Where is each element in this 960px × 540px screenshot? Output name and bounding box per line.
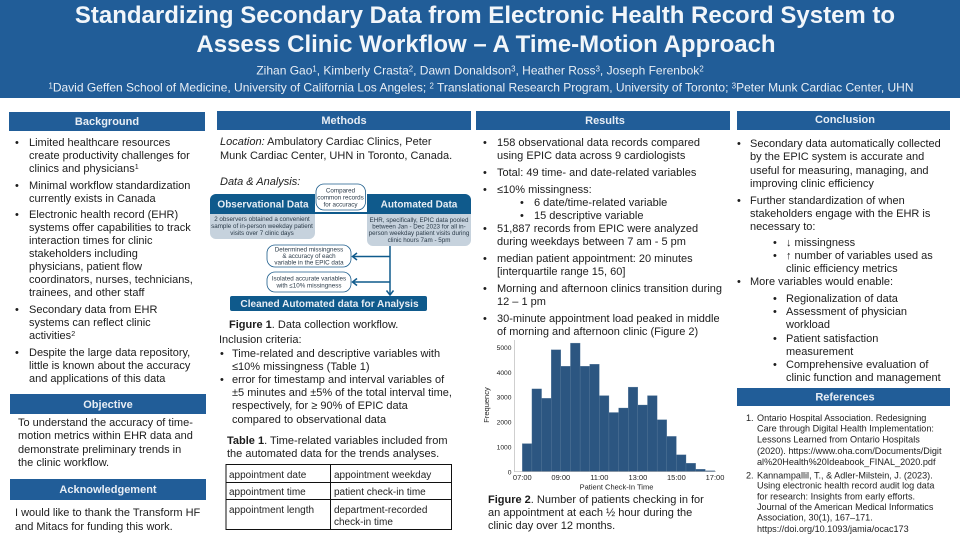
results bullets: ≤10% missingness: [497, 184, 592, 196]
reference list: for research: Insights from early efforts. [757, 492, 915, 502]
background bullets: • [15, 347, 19, 359]
conclusion bullets: Further standardization of when [750, 195, 905, 207]
background bullets: stakeholders including [29, 248, 138, 260]
background bullets: Limited healthcare resources [29, 137, 171, 149]
affiliations: Peter Munk Cardiac Center, UHN [736, 80, 914, 94]
results bullets: 51,887 records from EPIC were analyzed [497, 223, 698, 235]
x axis labels: 09:00 [551, 473, 570, 482]
reference list: Ontario Hospital Association. Redesigning [757, 413, 926, 423]
conclusion bullets: • [773, 333, 777, 345]
conclusion bullets: • [773, 306, 777, 318]
automated description [369, 217, 470, 244]
objective text [18, 417, 193, 469]
panel: acknowledgement [10, 479, 206, 533]
conclusion bullets: • [773, 359, 777, 371]
conclusion bullets: • [737, 276, 741, 288]
background bullets: and applications of this data [29, 373, 166, 385]
isolated variables pill: Isolated accurate variables [272, 276, 346, 282]
panel: background: Background [75, 116, 139, 128]
cleaned data bar [230, 296, 427, 311]
affiliations: 1 [48, 82, 53, 90]
conclusion bullets: Regionalization of data [786, 293, 899, 305]
automated description: person weekday patient visits during [369, 230, 470, 237]
x axis labels: 15:00 [667, 473, 686, 482]
data and analysis label: Data & Analysis: [220, 176, 300, 188]
conclusion bullets: clinic function and management [786, 372, 941, 384]
inclusion criteria: Time-related and descriptive variables with [232, 348, 440, 360]
reference list: Journal of the American Medical Informatics [757, 502, 934, 512]
authors: , Joseph Ferenbok [600, 64, 700, 78]
reference list: Lessons Learned from Ontario Hospitals [757, 434, 920, 444]
results bullets: 12 – 1 pm [497, 296, 546, 308]
conclusion bullets: workload [785, 319, 830, 331]
background bullets [15, 137, 193, 385]
table 1: appointment weekday [334, 470, 431, 481]
cleaned data bar: Cleaned Automated data for Analysis [240, 299, 419, 310]
x axis title: Patient Check-In Time [580, 482, 653, 492]
observational data header: Observational Data [217, 200, 309, 210]
conclusion bullets: improving clinic efficiency [750, 178, 874, 190]
results bullets: • [483, 184, 487, 196]
affiliations: David Geffen School of Medicine, University of California Los Angeles; [53, 80, 429, 94]
panel: acknowledgement: Acknowledgement [59, 484, 157, 496]
conclusion bullets: stakeholders engage with the EHR is [750, 208, 931, 220]
panel: methods: Methods [321, 115, 367, 127]
reference list: https://doi.org/10.1093/jamia/ocac173 [757, 524, 909, 534]
x axis labels: 11:00 [590, 473, 608, 482]
table 1 [226, 464, 452, 530]
inclusion criteria: • [220, 348, 224, 360]
x axis labels: 17:00 [706, 473, 724, 482]
observational description [211, 216, 313, 237]
table 1: appointment length [229, 505, 314, 516]
panel: methods [210, 111, 471, 530]
axes [514, 340, 716, 472]
table 1: patient check-in time [334, 487, 426, 498]
background bullets: interaction times for clinic [29, 235, 153, 247]
acknowledgement text: I would like to thank the Transform HF [15, 507, 201, 519]
automated data header [367, 194, 471, 214]
flow diagram: data collection workflow [210, 184, 471, 311]
location text: Location: Ambulatory Cardiac Clinics, Peter [220, 136, 432, 148]
background bullets: physicians, patient flow [29, 261, 142, 273]
conclusion bullets: Secondary data automatically collected [750, 138, 941, 150]
table 1 caption: Table 1. Time-related variables included from [227, 435, 448, 447]
results bullets: 6 date/time-related variable [534, 197, 667, 209]
observational description: sample of in-person weekday patient [211, 223, 313, 230]
conclusion bullets: • [773, 293, 777, 305]
panel: objective: Objective [83, 399, 133, 411]
authors: Zihan Gao [256, 64, 312, 78]
results bullets: • [483, 137, 487, 149]
results bullets: using EPIC data across 9 cardiologists [497, 150, 686, 162]
background bullets: Despite the large data repository, [29, 347, 190, 359]
conclusion bullets: • [737, 138, 741, 150]
conclusion bullets: Patient satisfaction [786, 333, 878, 345]
determined missingness pill: variable in the EPIC data [274, 260, 344, 266]
determined missingness pill: & accuracy of each [282, 253, 336, 260]
inclusion criteria: compared to observational data [232, 414, 387, 426]
automated description: clinic hours 7am - 5pm [388, 237, 450, 244]
reference list [746, 413, 942, 534]
inclusion criteria: error for timestamp and interval variables of [232, 374, 445, 386]
panel: results: Results [585, 115, 625, 127]
results bullets: • [520, 197, 524, 209]
compared records pill: common records [317, 194, 364, 202]
x axis labels: 07:00 [513, 473, 532, 482]
reference list: Association, 30(1), 167–171. [757, 512, 873, 522]
observational data header [210, 194, 315, 214]
background bullets: clinics and physicians [29, 163, 135, 175]
isolated variables pill [267, 272, 351, 292]
background bullets: Electronic health record (EHR) [29, 209, 178, 221]
results bullets: of morning and afternoon clinic (Figure 2) [497, 326, 698, 338]
background bullets: • [15, 304, 19, 316]
reference list: Care through Digital Health Implementation: [757, 424, 934, 434]
y axis labels: 0 [508, 469, 512, 476]
acknowledgement text: and Mitacs for funding this work. [15, 521, 173, 533]
panel: conclusion [737, 111, 950, 384]
table 1: appointment date [229, 470, 307, 481]
background bullets: create productivity challenges for [29, 150, 190, 162]
objective text: motion metrics within EHR data and [18, 430, 193, 442]
conclusion bullets: Comprehensive evaluation of [786, 359, 929, 371]
background bullets: • [15, 209, 19, 221]
conclusion bullets: • [773, 250, 777, 262]
conclusion bullets [737, 138, 941, 384]
y axis labels: 4000 [497, 370, 512, 377]
results bullets: during weekdays between 7 am - 5 pm [497, 236, 686, 248]
y axis title: Frequency [482, 387, 491, 423]
y axis labels: 5000 [497, 345, 512, 352]
reference list: al%20Health%20Ideabook_FINAL_2020.pdf [757, 457, 936, 467]
title: Standardizing Secondary Data from Electronic Health Record System to [75, 2, 895, 29]
inclusion criteria: ≤10% missingness (Table 1) [232, 361, 369, 373]
conclusion bullets: by the EPIC system is accurate and [750, 151, 924, 163]
conclusion bullets: ↑ number of variables used as [786, 250, 933, 262]
background bullets: trainees, and other staff [29, 287, 145, 299]
panel: objective [10, 394, 206, 469]
determined missingness pill: Determined missingness [275, 246, 343, 254]
header banner [0, 0, 960, 98]
histogram: patient check-in time [482, 340, 724, 492]
conclusion bullets: clinic efficiency metrics [786, 263, 898, 275]
conclusion bullets: More variables would enable: [750, 276, 893, 288]
y axis labels: 2000 [497, 420, 512, 426]
conclusion bullets: ↓ missingness [786, 237, 856, 249]
affiliations: 2 [429, 82, 434, 90]
bars [522, 343, 715, 472]
y axis labels: 3000 [497, 395, 512, 402]
objective text: To understand the accuracy of time- [18, 417, 193, 429]
reference list: 2. [746, 470, 754, 480]
affiliations: 3 [732, 82, 736, 90]
authors: , Dawn Donaldson [413, 64, 511, 78]
table 1 caption: the automated data for the trends analyses. [227, 448, 439, 460]
background bullets: Secondary data from EHR [29, 304, 157, 316]
background bullets: • [15, 180, 19, 192]
panel: results [476, 111, 730, 532]
results bullets: • [520, 210, 524, 222]
results bullets: • [483, 313, 487, 325]
automated description: between Jan - Dec 2023 for all in- [372, 224, 466, 230]
arrows [352, 246, 394, 295]
background bullets: 1 [135, 163, 139, 171]
authors: 3 [596, 64, 600, 74]
table 1: appointment time [229, 487, 306, 498]
authors: , Heather Ross [516, 64, 596, 78]
title [75, 2, 895, 58]
results bullets: • [483, 283, 487, 295]
reference list: (2020). https://www.oha.com/Documents/Digit [757, 446, 942, 456]
conclusion bullets: necessary to: [750, 221, 815, 233]
objective text: the clinic workflow. [18, 457, 109, 469]
inclusion criteria: Inclusion criteria: [219, 334, 302, 346]
authors: 2 [699, 64, 704, 74]
conclusion bullets: measurement [786, 346, 853, 358]
automated data header: Automated Data [381, 200, 458, 210]
figure 2 caption: an appointment at each ½ hour during the [488, 507, 692, 519]
conclusion bullets: • [737, 195, 741, 207]
y axis labels: 1000 [497, 444, 512, 451]
reference list: Using electronic health record audit log data [757, 480, 935, 490]
compared records pill: Compared [326, 188, 356, 194]
results bullets [483, 137, 722, 338]
results bullets: • [483, 223, 487, 235]
table 1 caption [227, 435, 448, 460]
reference list: Kannampallil, T., & Adler-Milstein, J. (2023). [757, 470, 933, 480]
results bullets: • [483, 167, 487, 179]
inclusion criteria [219, 334, 452, 426]
table 1: check-in time [334, 517, 393, 528]
results bullets: • [483, 253, 487, 265]
figure 2 caption: Figure 2. Number of patients checking in for [488, 494, 704, 506]
figure 2 caption [488, 494, 704, 532]
panel: references [737, 388, 950, 534]
inclusion criteria: ±5 minutes and ±5% of the total interval time, [232, 387, 452, 399]
background bullets: • [15, 137, 19, 149]
compared records pill [316, 184, 366, 210]
background bullets: systems can reflect clinic [29, 317, 151, 329]
background bullets: coordinators, nurses, technicians, [29, 274, 193, 286]
background bullets: 2 [71, 330, 75, 338]
results bullets: 30-minute appointment load peaked in middle [497, 313, 720, 325]
panel: background [9, 112, 205, 385]
observational description: visits over 7 clinic days [230, 230, 294, 237]
conclusion bullets: • [773, 237, 777, 249]
background bullets: currently exists in Canada [29, 193, 156, 205]
results bullets: [interquartile range 15, 60] [497, 266, 625, 278]
location text: Munk Cardiac Center, UHN in Toronto, Canada. [220, 150, 452, 162]
results bullets: 15 descriptive variable [534, 210, 643, 222]
figure 2 caption: clinic day over 12 months. [488, 520, 615, 532]
figure 1 caption: Figure 1. Data collection workflow. [229, 319, 398, 331]
location text [220, 136, 452, 162]
inclusion criteria: • [220, 374, 224, 386]
compared records pill: for accuracy [323, 202, 358, 208]
authors: , Kimberly Crasta [317, 64, 409, 78]
automated description: EHR, specifically, EPIC data pooled [370, 217, 469, 224]
panel: references: References [815, 392, 875, 404]
title: Assess Clinic Workflow – A Time-Motion Approach [196, 31, 776, 58]
observational description: 2 observers obtained a convenient [214, 216, 310, 223]
authors: 3 [511, 64, 516, 74]
authors: 1 [312, 64, 317, 74]
isolated variables pill: with ≤10% missingness [276, 282, 341, 290]
x axis labels: 13:00 [629, 473, 647, 482]
panel: conclusion: Conclusion [815, 114, 875, 126]
background bullets: Minimal workflow standardization [29, 180, 190, 192]
conclusion bullets: Assessment of physician [786, 306, 907, 318]
determined missingness pill [267, 245, 351, 267]
x axis labels [513, 473, 724, 482]
objective text: demonstrate preliminary trends in [18, 444, 181, 456]
background bullets: little is known about the accuracy [29, 360, 191, 372]
results bullets: Total: 49 time- and date-related variables [497, 167, 697, 179]
background bullets: activities [29, 330, 71, 342]
inclusion criteria: respectively, for ≥ 90% of EPIC data [232, 400, 409, 412]
authors: 2 [409, 64, 413, 74]
table 1: department-recorded [334, 505, 427, 516]
background bullets: systems offer capabilities to track [29, 222, 191, 234]
results bullets: 158 observational data records compared [497, 137, 700, 149]
conclusion bullets: useful for measuring, managing, and [750, 165, 929, 177]
results bullets: Morning and afternoon clinics transition during [497, 283, 722, 295]
results bullets: median patient appointment: 20 minutes [497, 253, 693, 265]
y axis labels [497, 345, 512, 476]
reference list: 1. [746, 413, 754, 423]
acknowledgement text [15, 507, 201, 533]
affiliations: Translational Research Program, University of Toronto; [434, 80, 732, 94]
